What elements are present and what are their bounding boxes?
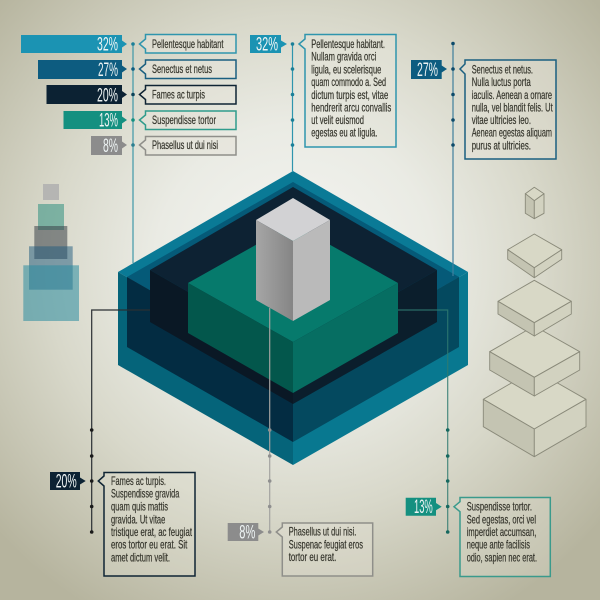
panel: 27%: Senectus et netus.: [472, 62, 533, 76]
panel: 32%: quam commodo a. Sed: [311, 75, 386, 89]
panel: 20%: tristique erat, ac feugiat: [111, 525, 192, 539]
panel: 20%: amet dictum velit.: [111, 550, 170, 564]
panel: 13%: neque ante facilisis: [467, 538, 530, 552]
panel: 13%: odio, sapien nec erat.: [467, 550, 537, 564]
panel: 32%: hendrerit arcu convallis: [311, 100, 391, 114]
panel: 32%: [250, 34, 396, 147]
panel: 32%: egestas eu at ligula.: [311, 126, 377, 140]
legend row: 8%: Phasellus ut dui nisi: [152, 138, 218, 152]
panel: 32%: dictum turpis est, vitae: [311, 88, 389, 102]
legend row: 13%: Suspendisse tortor: [152, 113, 216, 127]
panel: 20%: 20%: [56, 472, 77, 492]
legend row: 20%: [46, 85, 236, 106]
panel: 20%: Fames ac turpis.: [111, 474, 166, 488]
panel: 20%: [50, 472, 195, 576]
panel: 27%: vitae ultricies leo.: [472, 113, 531, 127]
panel: 20%: gravida. Ut vitae: [111, 512, 165, 526]
panel: 13%: Suspendisse tortor.: [467, 499, 532, 513]
legend row: 20%: 20%: [97, 86, 118, 106]
left stacked squares icon: [23, 184, 79, 321]
panel: 20%: Suspendisse gravida: [111, 487, 179, 501]
connector line: 8% panel: [268, 308, 272, 534]
central isometric layered chart: [118, 171, 468, 465]
panel: 32%: 32%: [256, 34, 278, 56]
panel: 32%: Pellentesque habitant.: [311, 37, 385, 51]
panel: 8%: Phasellus ut dui nisi.: [289, 524, 356, 538]
connector line: 20% panel: [90, 310, 150, 534]
legend row: 13%: [64, 110, 236, 132]
legend row: 27%: 27%: [98, 60, 118, 81]
right stacked isometric boxes icon: [483, 187, 586, 457]
connector line: 27% panel: [451, 42, 455, 276]
legend row: 32%: 32%: [97, 34, 118, 56]
connector line: 32% left list: [131, 42, 135, 263]
panel: 8%: Suspenac feugiat eros: [289, 537, 363, 551]
panel: 27%: [411, 60, 556, 159]
panel: 27%: iaculis. Aenean a ornare: [472, 88, 552, 102]
panel: 27%: purus at ultricies.: [472, 139, 531, 153]
panel: 32%: ligula, eu scelerisque: [311, 62, 381, 76]
panel: 13%: Sed egestas, orci vel: [467, 512, 536, 526]
panel: 20%: eros tortor eu erat. Sit: [111, 538, 188, 552]
legend row: 8%: [91, 136, 236, 157]
panel: 27%: Aenean egestas aliquam: [472, 126, 552, 140]
panel: 32%: Nullam gravida orci: [311, 50, 376, 64]
panel: 13%: [406, 497, 550, 576]
legend row: 32%: Pellentesque habitant: [152, 37, 224, 51]
panel: 8%: 8%: [239, 522, 255, 544]
legend row: 32%: [21, 34, 236, 56]
panel: 13%: 13%: [414, 497, 433, 518]
legend row: 27%: [38, 60, 236, 81]
panel: 27%: Nulla luctus porta: [472, 75, 531, 89]
panel: 27%: nulla, vel blandit felis. Ut: [472, 100, 553, 114]
legend row: 8%: 8%: [103, 136, 118, 157]
connector line: 13% panel: [398, 310, 450, 534]
panel: 8%: tortor eu erat.: [289, 550, 336, 564]
panel: 27%: 27%: [417, 60, 438, 81]
panel: 8%: [228, 522, 373, 576]
panel: 32%: ut velit euismod: [311, 113, 364, 127]
legend row: 20%: Fames ac turpis: [152, 88, 205, 102]
connector line: 32% panel: [291, 42, 294, 172]
panel: 20%: quam quis mattis: [111, 500, 168, 514]
legend row: 27%: Senectus et netus: [152, 62, 212, 76]
panel: 13%: imperdiet accumsan,: [467, 525, 536, 539]
legend row: 13%: 13%: [99, 110, 118, 132]
